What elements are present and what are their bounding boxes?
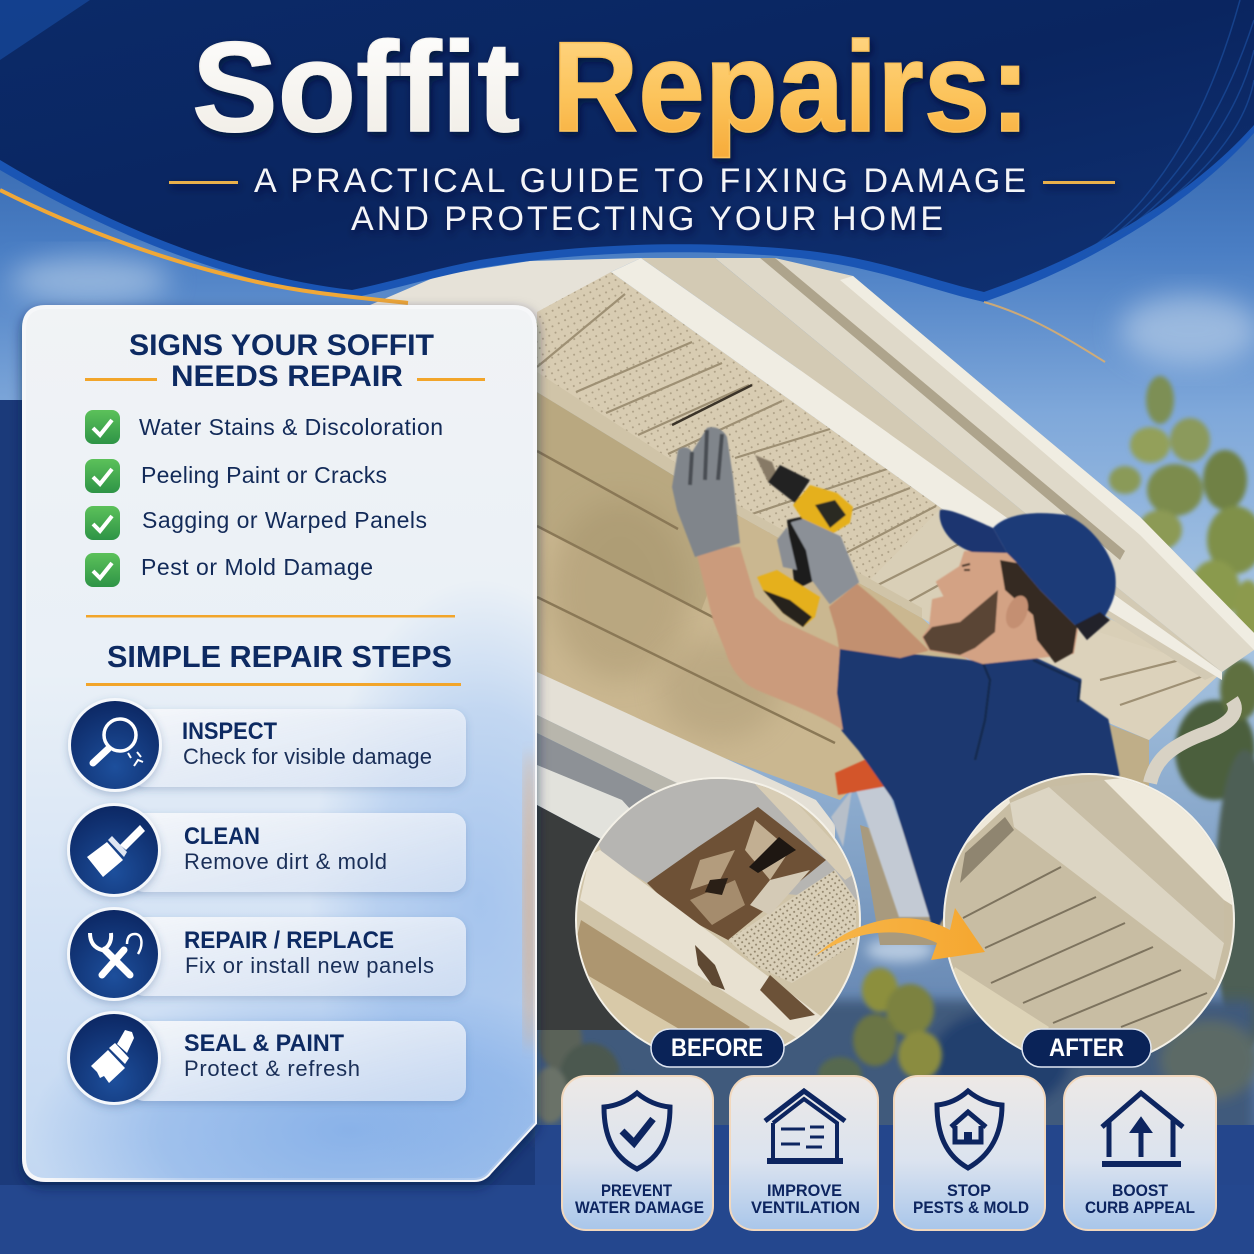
- step 3: repair / replace: REPAIR / REPLACE: [184, 927, 394, 954]
- drill: [755, 455, 780, 482]
- soffit: [530, 272, 1222, 740]
- benefit: prevent water damage: WATER DAMAGE: [575, 1198, 704, 1217]
- after photo circle: [940, 770, 1240, 1070]
- benefit: stop pests and mold: STOP: [947, 1181, 991, 1200]
- title: Soffit: [192, 16, 520, 159]
- step 4: seal and paint: Protect & refresh: [184, 1056, 360, 1081]
- icon: house with up arrow: [1102, 1093, 1183, 1164]
- heading: steps: [86, 639, 461, 686]
- left house wall: [0, 400, 537, 1254]
- tree right: [1109, 376, 1254, 1050]
- benefit: boost curb appeal: [1064, 1076, 1216, 1230]
- icon: magnifier: [93, 719, 143, 766]
- step 1: inspect: INSPECT: [182, 718, 277, 745]
- heading: signs: [85, 329, 485, 393]
- step 2: clean: Remove dirt & mold: [184, 849, 387, 874]
- before photo circle: [575, 777, 861, 1046]
- title: Repairs:: [552, 16, 1030, 159]
- step 2: clean: CLEAN: [184, 823, 260, 850]
- fascia and gutter: [370, 258, 641, 322]
- worker on ladder with drill: [672, 427, 1118, 930]
- shirt: [837, 648, 1118, 930]
- lower trees: [535, 938, 1254, 1140]
- step 3: repair / replace: [67, 907, 466, 1001]
- title: [192, 16, 1030, 159]
- benefit: boost curb appeal: CURB APPEAL: [1085, 1198, 1195, 1217]
- benefit: boost curb appeal: BOOST: [1112, 1181, 1169, 1200]
- item: sagging panels: Sagging or Warped Panels: [142, 507, 427, 533]
- face: [923, 552, 1077, 663]
- step 1: inspect: [68, 698, 466, 792]
- label: before: BEFORE: [671, 1034, 763, 1062]
- subtitle: A PRACTICAL GUIDE TO FIXING DAMAGE: [254, 162, 1026, 200]
- window trim: [537, 672, 835, 860]
- checklist: [85, 410, 443, 587]
- raised arms: [695, 547, 843, 730]
- label: after: AFTER: [1049, 1034, 1124, 1062]
- step 2: clean: [67, 803, 466, 897]
- benefit: improve ventilation: VENTILATION: [751, 1198, 860, 1217]
- label: after: [1022, 1029, 1151, 1067]
- downspout: [1150, 700, 1235, 783]
- icon: ventilated house: [765, 1091, 845, 1161]
- heading: signs: NEEDS REPAIR: [171, 360, 403, 393]
- step 3: repair / replace: Fix or install new panels: [185, 953, 434, 978]
- icon: crossed tools: [90, 933, 141, 975]
- benefit: improve ventilation: IMPROVE: [767, 1181, 842, 1200]
- icon: shield house: [937, 1091, 1002, 1168]
- benefit: prevent water damage: PREVENT: [601, 1181, 673, 1200]
- icon: shield check: [604, 1093, 670, 1169]
- item: peeling paint: Peeling Paint or Cracks: [141, 462, 387, 488]
- ladder: [831, 753, 933, 917]
- step 4: seal and paint: [67, 1011, 466, 1105]
- item: pest damage: [85, 553, 373, 587]
- subtitle: [169, 162, 1115, 238]
- item: pest damage: Pest or Mold Damage: [141, 554, 373, 580]
- subtitle: AND PROTECTING YOUR HOME: [351, 200, 943, 238]
- item: water stains: [85, 410, 443, 444]
- step 4: seal and paint: SEAL & PAINT: [184, 1030, 344, 1057]
- benefit: prevent water damage: [562, 1076, 713, 1230]
- benefit: improve ventilation: [730, 1076, 878, 1230]
- benefit: stop pests and mold: PESTS & MOLD: [913, 1198, 1029, 1217]
- item: water stains: Water Stains & Discoloration: [139, 414, 443, 440]
- step 1: inspect: Check for visible damage: [183, 744, 432, 769]
- benefit: stop pests and mold: [894, 1076, 1045, 1230]
- item: sagging panels: [85, 506, 427, 540]
- icon: scraper brush: [87, 825, 145, 877]
- label: before: [651, 1029, 784, 1067]
- panel: signs and repair steps: [14, 301, 546, 1192]
- heading: signs: SIGNS YOUR SOFFIT: [129, 329, 434, 362]
- arrow: before to after: [814, 908, 985, 960]
- header banner: [0, 0, 1254, 362]
- item: peeling paint: [85, 459, 387, 493]
- heading: steps: SIMPLE REPAIR STEPS: [107, 639, 452, 674]
- cap: [993, 513, 1116, 640]
- gloves: [672, 427, 740, 557]
- siding: [537, 392, 1000, 800]
- icon: paintbrush: [91, 1030, 134, 1083]
